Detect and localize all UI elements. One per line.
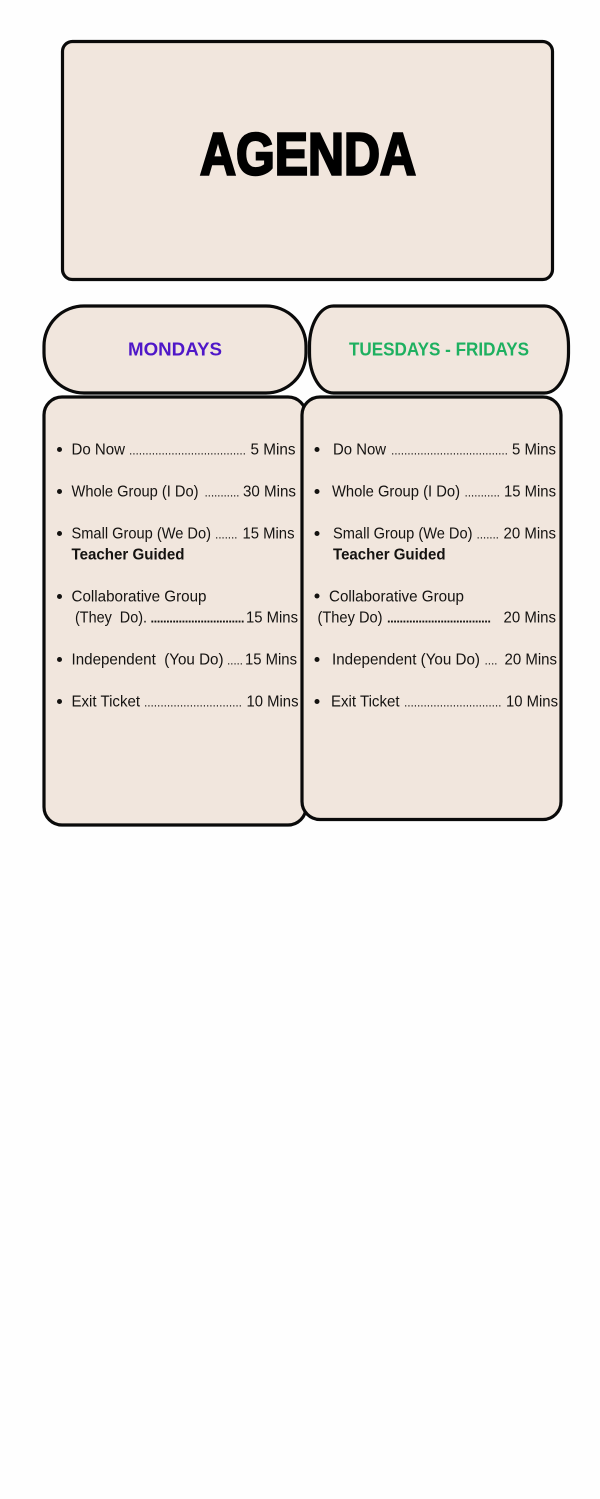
- row: Small Group: .......: [476, 528, 499, 542]
- row: Independent: 15 Mins: [245, 652, 297, 668]
- row: Whole Group: ...........: [204, 486, 240, 500]
- row: Whole Group: ...........: [464, 486, 500, 500]
- heading: Mondays: MONDAYS: [128, 338, 222, 360]
- row: Collaborative Group: (They Do).: [75, 610, 147, 626]
- row: Collaborative Group: ..............................: [150, 610, 244, 626]
- row: Small Group: Small Group (We Do): [333, 526, 472, 542]
- row: Exit Ticket: ..............................: [404, 696, 502, 710]
- row: Exit Ticket: 10 Mins: [246, 694, 298, 710]
- panel: title card: [62, 42, 552, 280]
- row: Small Group: .......: [215, 528, 238, 542]
- row: Small Group: 15 Mins: [242, 526, 294, 542]
- row: Exit Ticket: Exit Ticket: [72, 694, 141, 710]
- row: Small Group: Small Group (We Do): [72, 526, 211, 542]
- row: Do Now: Do Now: [72, 442, 125, 458]
- row: Independent: 20 Mins: [504, 652, 557, 668]
- row: Whole Group: 15 Mins: [504, 484, 556, 500]
- row: Collaborative Group: 20 Mins: [504, 610, 556, 626]
- row: Exit Ticket: [314, 694, 558, 710]
- row: Collaborative Group: .................................: [387, 610, 491, 626]
- row: Exit Ticket: 10 Mins: [506, 694, 558, 710]
- row: Independent: [57, 652, 297, 668]
- row: Whole Group: Whole Group (I Do): [72, 484, 198, 500]
- row: Small Group: [314, 526, 556, 564]
- row: Independent: .....: [227, 654, 243, 668]
- row: Exit Ticket: [57, 694, 298, 710]
- row: Do Now: [314, 442, 556, 458]
- row: Collaborative Group: [314, 588, 556, 626]
- panel: Tuesdays to Fridays schedule: [302, 397, 561, 820]
- row: Collaborative Group: Collaborative Group: [329, 588, 464, 606]
- row: Do Now: 5 Mins: [250, 442, 296, 458]
- row: Do Now: ....................................: [129, 444, 246, 458]
- panel: Tuesdays to Fridays header: [310, 306, 568, 393]
- row: Exit Ticket: ..............................: [144, 696, 242, 710]
- row: Collaborative Group: [57, 588, 298, 626]
- row: Whole Group: [314, 484, 556, 500]
- row: Small Group: [57, 526, 294, 564]
- row: Whole Group: 30 Mins: [243, 484, 296, 500]
- row: Do Now: ....................................: [391, 444, 508, 458]
- row: Whole Group: [57, 484, 296, 500]
- panel: Mondays header: [44, 306, 306, 393]
- row: Small Group: Teacher Guided: [72, 546, 184, 564]
- row: Collaborative Group: 15 Mins: [246, 610, 298, 626]
- panel: Mondays schedule: [44, 397, 306, 825]
- row: Collaborative Group: (They Do): [318, 610, 382, 626]
- row: Collaborative Group: Collaborative Group: [72, 588, 207, 606]
- heading: Tuesdays to Fridays: TUESDAYS - FRIDAYS: [349, 338, 529, 360]
- row: Do Now: [57, 442, 296, 458]
- row: Do Now: Do Now: [333, 442, 386, 458]
- row: Independent: [314, 652, 557, 668]
- row: Small Group: 20 Mins: [504, 526, 556, 542]
- row: Whole Group: Whole Group (I Do): [332, 484, 460, 500]
- title: AGENDA: [200, 122, 416, 188]
- row: Independent: ....: [484, 654, 498, 668]
- row: Exit Ticket: Exit Ticket: [331, 694, 400, 710]
- row: Independent: Independent (You Do): [72, 652, 224, 668]
- row: Do Now: 5 Mins: [512, 442, 556, 458]
- row: Independent: Independent (You Do): [332, 652, 480, 668]
- row: Small Group: Teacher Guided: [333, 546, 446, 564]
